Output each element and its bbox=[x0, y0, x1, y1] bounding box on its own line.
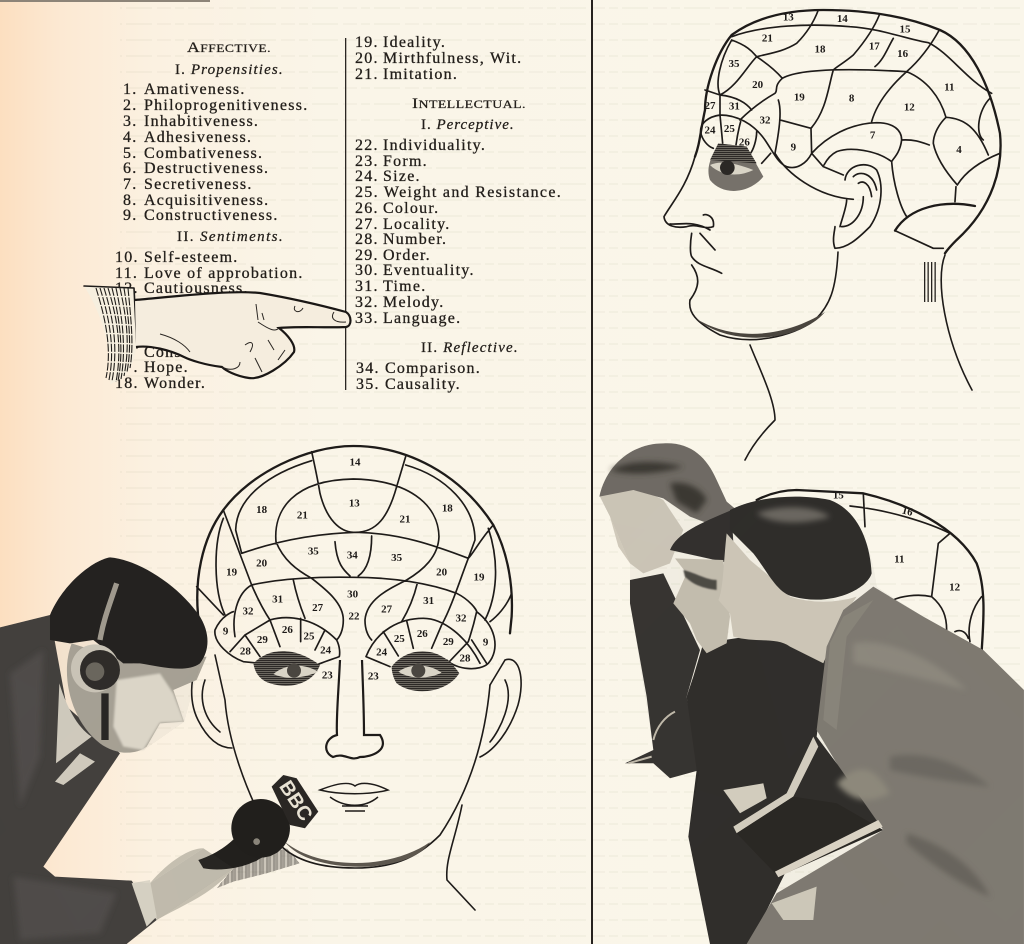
front head numbers: 26 bbox=[417, 628, 428, 640]
list of reflective faculties 34 to 35: Causality. bbox=[385, 376, 461, 393]
front head chin hatching bbox=[285, 842, 430, 867]
jacket bbox=[0, 615, 157, 944]
front head numbers: 23 bbox=[368, 671, 379, 683]
list of propensities 1 to 9: Constructiveness. bbox=[144, 207, 279, 224]
front head numbers: 21 bbox=[297, 510, 308, 522]
list of perceptive faculties 22 to 33: 30. bbox=[355, 262, 379, 279]
woman hair sheen bbox=[757, 507, 830, 522]
woman hair bbox=[730, 497, 872, 600]
front head right eye bbox=[392, 651, 459, 691]
halftone overlay on onlookers bbox=[599, 443, 1024, 944]
side head numbers: 26 bbox=[739, 137, 750, 149]
back man hair bbox=[599, 443, 737, 527]
front head numbers: 30 bbox=[347, 588, 359, 600]
front head right ear bbox=[480, 659, 521, 757]
list of propensities 1 to 9: Philoprogenitiveness. bbox=[144, 97, 308, 114]
side head numbers: 31 bbox=[729, 101, 740, 113]
side head nose and lips bbox=[664, 157, 722, 300]
front head numbers: 22 bbox=[348, 611, 360, 623]
front head numbers: 21 bbox=[399, 513, 410, 525]
list of sentiments 10 to 18: Hope. bbox=[144, 359, 189, 376]
list of reflective faculties 34 to 35 bbox=[356, 360, 481, 393]
list of propensities 1 to 9: 7. bbox=[123, 176, 138, 193]
list of perceptive faculties 22 to 33: 31. bbox=[355, 278, 379, 295]
front head numbers: 9 bbox=[223, 626, 229, 638]
side head neck hatching bbox=[922, 262, 938, 302]
front head numbers: 27 bbox=[312, 602, 324, 614]
list of perceptive faculties 22 to 33 bbox=[355, 137, 562, 327]
front head numbers: 20 bbox=[436, 567, 448, 579]
list of perceptive faculties 22 to 33: Time. bbox=[383, 278, 426, 295]
front head numbers bbox=[223, 456, 489, 683]
front head nose bbox=[326, 660, 383, 758]
side head numbers: 27 bbox=[705, 100, 716, 112]
list of perceptive faculties 22 to 33: 26. bbox=[355, 200, 379, 217]
side head numbers: 14 bbox=[837, 13, 848, 25]
front head numbers: 35 bbox=[308, 546, 319, 558]
middle man body bbox=[687, 630, 890, 944]
list of perceptive faculties 22 to 33: Melody. bbox=[383, 294, 444, 311]
list of propensities 1 to 9: 1. bbox=[123, 81, 138, 98]
list of sentiments 10 to 18: 17. bbox=[115, 359, 139, 376]
side head numbers: 18 bbox=[814, 43, 826, 55]
page gutter line bbox=[591, 0, 593, 944]
list of perceptive faculties 22 to 33: 28. bbox=[355, 231, 379, 248]
list of propensities 1 to 9: Destructiveness. bbox=[144, 160, 269, 177]
list of perceptive faculties 22 to 33: Language. bbox=[383, 310, 461, 327]
icon: pointing hand bbox=[84, 286, 350, 384]
subheading: Propensities: I. Propensities. bbox=[175, 62, 283, 78]
jacket folds bbox=[837, 642, 990, 897]
front head left ear bbox=[192, 655, 232, 748]
list of propensities 1 to 9: Combativeness. bbox=[144, 145, 263, 162]
list of perceptive faculties 22 to 33: 33. bbox=[355, 310, 379, 327]
side-profile phrenology head bbox=[664, 10, 1001, 460]
list of sentiments 19 to 21: Ideality. bbox=[383, 34, 446, 51]
partial head behind onlookers: 11 bbox=[894, 553, 904, 565]
partial head behind onlookers: 12 bbox=[949, 582, 961, 594]
front head numbers: 20 bbox=[256, 557, 268, 569]
jacket shading bbox=[10, 650, 117, 940]
list of perceptive faculties 22 to 33: Form. bbox=[383, 153, 428, 170]
list of propensities 1 to 9: 9. bbox=[123, 207, 138, 224]
cranium outline and region lines bbox=[664, 10, 1001, 300]
front head cranium and regions bbox=[197, 446, 512, 691]
front head numbers: 19 bbox=[226, 566, 238, 578]
list of sentiments 10 to 18: Conscientiousness. bbox=[144, 344, 289, 361]
partial head behind onlookers: 16 bbox=[900, 504, 915, 519]
photo: man with headphones and microphone bbox=[0, 557, 318, 944]
side head numbers: 9 bbox=[791, 141, 797, 153]
book cover bbox=[737, 797, 883, 877]
side head numbers: 21 bbox=[762, 33, 773, 45]
photo: three onlookers with partial phrenology head bbox=[599, 443, 1024, 944]
side head numbers: 15 bbox=[899, 23, 911, 35]
list of sentiments 10 to 18: 12. bbox=[115, 280, 139, 297]
side head numbers: 19 bbox=[794, 91, 805, 103]
side head eye bbox=[708, 143, 763, 191]
front head numbers: 27 bbox=[381, 603, 393, 615]
side head ear bbox=[834, 165, 881, 248]
front head numbers: 14 bbox=[349, 456, 361, 468]
earphone bbox=[71, 644, 120, 740]
shirt cuff bbox=[132, 880, 157, 927]
front head numbers: 25 bbox=[394, 633, 405, 645]
subheading: Sentiments: II. Sentiments. bbox=[177, 229, 283, 245]
side head numbers: 8 bbox=[849, 92, 855, 104]
cuff bbox=[84, 286, 137, 384]
list of propensities 1 to 9: 8. bbox=[123, 192, 138, 209]
partial head behind onlookers bbox=[757, 490, 984, 652]
front head numbers: 24 bbox=[376, 646, 388, 658]
book page highlight bbox=[775, 820, 883, 877]
front head numbers: 18 bbox=[442, 502, 453, 514]
list of propensities 1 to 9: 2. bbox=[123, 97, 138, 114]
heading: Intellectual: INTELLECTUAL. bbox=[412, 96, 526, 112]
list of perceptive faculties 22 to 33: 32. bbox=[355, 294, 379, 311]
column divider bbox=[345, 38, 346, 390]
list of propensities 1 to 9: 6. bbox=[123, 160, 138, 177]
back man body bbox=[625, 573, 700, 778]
BBC badge: BBC bbox=[274, 777, 317, 825]
side head jaw and neck bbox=[690, 252, 972, 460]
list of propensities 1 to 9: 5. bbox=[123, 145, 138, 162]
front head mouth bbox=[320, 783, 388, 811]
heading: Affective: AFFECTIVE. bbox=[187, 40, 271, 56]
side head numbers: 20 bbox=[752, 79, 764, 91]
list of sentiments 10 to 18: 11. bbox=[115, 265, 138, 282]
side head numbers: 17 bbox=[869, 41, 880, 53]
side head numbers: 7 bbox=[870, 129, 876, 141]
front head numbers: 18 bbox=[256, 504, 268, 516]
side head numbers: 16 bbox=[897, 48, 909, 60]
list of sentiments 19 to 21: Imitation. bbox=[383, 66, 458, 83]
lower hand bbox=[772, 887, 817, 920]
halftone overlay on man bbox=[0, 557, 233, 944]
front head numbers: 28 bbox=[459, 652, 471, 664]
list of perceptive faculties 22 to 33: Number. bbox=[383, 231, 447, 248]
list of perceptive faculties 22 to 33: 23. bbox=[355, 153, 379, 170]
list of perceptive faculties 22 to 33: Colour. bbox=[383, 200, 439, 217]
list of reflective faculties 34 to 35: 35. bbox=[356, 376, 380, 393]
back man hair shadow bbox=[610, 462, 707, 513]
list of perceptive faculties 22 to 33: 25. Weight and Resistance. bbox=[355, 184, 562, 201]
shirt collar bbox=[55, 683, 95, 785]
side head numbers: 24 bbox=[705, 125, 716, 137]
front head numbers: 34 bbox=[347, 549, 358, 561]
front head numbers: 26 bbox=[282, 624, 293, 636]
hair bbox=[50, 557, 207, 669]
list of perceptive faculties 22 to 33: Individuality. bbox=[383, 137, 486, 154]
back man face bbox=[600, 490, 683, 573]
book edge bbox=[733, 737, 818, 833]
side head numbers bbox=[705, 12, 962, 156]
jacket lapel bbox=[823, 600, 873, 730]
list of perceptive faculties 22 to 33: Eventuality. bbox=[383, 262, 475, 279]
front head numbers: 29 bbox=[257, 634, 268, 646]
list of sentiments 10 to 18: Self-esteem. bbox=[144, 249, 239, 266]
middle man eye shadow bbox=[683, 570, 717, 590]
text column: affective faculties bbox=[115, 40, 308, 392]
front head numbers: 19 bbox=[473, 572, 485, 584]
front head face outline bbox=[215, 655, 490, 910]
woman jacket bbox=[747, 587, 1024, 944]
front head numbers: 28 bbox=[240, 646, 251, 658]
list of sentiments 19 to 21 bbox=[355, 34, 522, 83]
subheading: Reflective: II. Reflective. bbox=[421, 340, 518, 356]
front head numbers: 32 bbox=[455, 613, 467, 625]
front head numbers: 35 bbox=[391, 552, 403, 564]
list of perceptive faculties 22 to 33: 24. bbox=[355, 168, 379, 185]
list of propensities 1 to 9: Inhabitiveness. bbox=[144, 113, 259, 130]
list of perceptive faculties 22 to 33: 29. bbox=[355, 247, 379, 264]
subheading: Perceptive: I. Perceptive. bbox=[421, 117, 514, 133]
list of sentiments 10 to 18: 10. bbox=[115, 249, 139, 266]
face highlight bbox=[113, 673, 184, 750]
front head numbers: 32 bbox=[243, 605, 254, 617]
list of propensities 1 to 9 bbox=[123, 81, 308, 224]
list of sentiments 19 to 21: 21. bbox=[355, 66, 379, 83]
front head numbers: 31 bbox=[272, 593, 283, 605]
list of perceptive faculties 22 to 33: 22. bbox=[355, 137, 379, 154]
list of propensities 1 to 9: 3. bbox=[123, 113, 138, 130]
hand and pointing finger bbox=[135, 292, 350, 378]
side head numbers: 11 bbox=[944, 82, 954, 94]
side head chin shading bbox=[695, 312, 825, 338]
front head numbers: 29 bbox=[443, 636, 454, 648]
list of sentiments 19 to 21: 19. bbox=[355, 34, 379, 51]
list of propensities 1 to 9: Adhesiveness. bbox=[144, 129, 252, 146]
side head numbers: 4 bbox=[956, 144, 962, 156]
front head numbers: 31 bbox=[423, 595, 434, 607]
list of propensities 1 to 9: 4. bbox=[123, 129, 138, 146]
hand bbox=[150, 848, 233, 920]
front head left eye bbox=[253, 651, 320, 686]
list of reflective faculties 34 to 35: Comparison. bbox=[385, 360, 481, 377]
side head numbers: 25 bbox=[724, 123, 735, 135]
list of sentiments 19 to 21: Mirthfulness, Wit. bbox=[383, 50, 522, 67]
list of propensities 1 to 9: Amativeness. bbox=[144, 81, 246, 98]
list of sentiments 10 to 18 bbox=[115, 249, 304, 392]
side head numbers: 12 bbox=[904, 102, 915, 114]
list of propensities 1 to 9: Secretiveness. bbox=[144, 176, 253, 193]
list of sentiments 10 to 18: Love of approbation. bbox=[144, 265, 304, 282]
front head numbers: 13 bbox=[349, 497, 360, 509]
list of perceptive faculties 22 to 33: Locality. bbox=[383, 216, 451, 233]
list of propensities 1 to 9: Acquisitiveness. bbox=[144, 192, 269, 209]
front head numbers: 24 bbox=[320, 645, 332, 657]
text column: intellectual faculties bbox=[355, 34, 562, 393]
headphone band bbox=[100, 583, 117, 640]
list of sentiments 19 to 21: 20. bbox=[355, 50, 379, 67]
list of reflective faculties 34 to 35: 34. bbox=[356, 360, 380, 377]
front phrenology head bbox=[0, 443, 1024, 944]
front head numbers: 23 bbox=[322, 670, 333, 682]
face bbox=[67, 643, 207, 753]
chin hatching beside microphone bbox=[217, 848, 300, 888]
back man collar highlights bbox=[628, 712, 675, 763]
list of perceptive faculties 22 to 33: Order. bbox=[383, 247, 431, 264]
microphone bbox=[198, 799, 290, 870]
side head numbers: 35 bbox=[728, 58, 740, 70]
middle man hair bbox=[670, 510, 733, 563]
list of perceptive faculties 22 to 33: Size. bbox=[383, 168, 421, 185]
side head numbers: 32 bbox=[759, 115, 771, 127]
list of sentiments 10 to 18: Wonder. bbox=[144, 375, 206, 392]
front head numbers: 25 bbox=[303, 631, 315, 643]
front head numbers: 9 bbox=[483, 637, 489, 649]
side head numbers: 13 bbox=[783, 12, 794, 24]
list of perceptive faculties 22 to 33: 27. bbox=[355, 216, 379, 233]
middle man face bbox=[673, 558, 730, 653]
woman face bbox=[718, 533, 857, 663]
list of sentiments 10 to 18: 18. bbox=[115, 375, 139, 392]
list of sentiments 10 to 18: Cautiousness. bbox=[144, 280, 249, 297]
partial head behind onlookers: 15 bbox=[833, 490, 844, 502]
upper hand bbox=[723, 783, 767, 813]
